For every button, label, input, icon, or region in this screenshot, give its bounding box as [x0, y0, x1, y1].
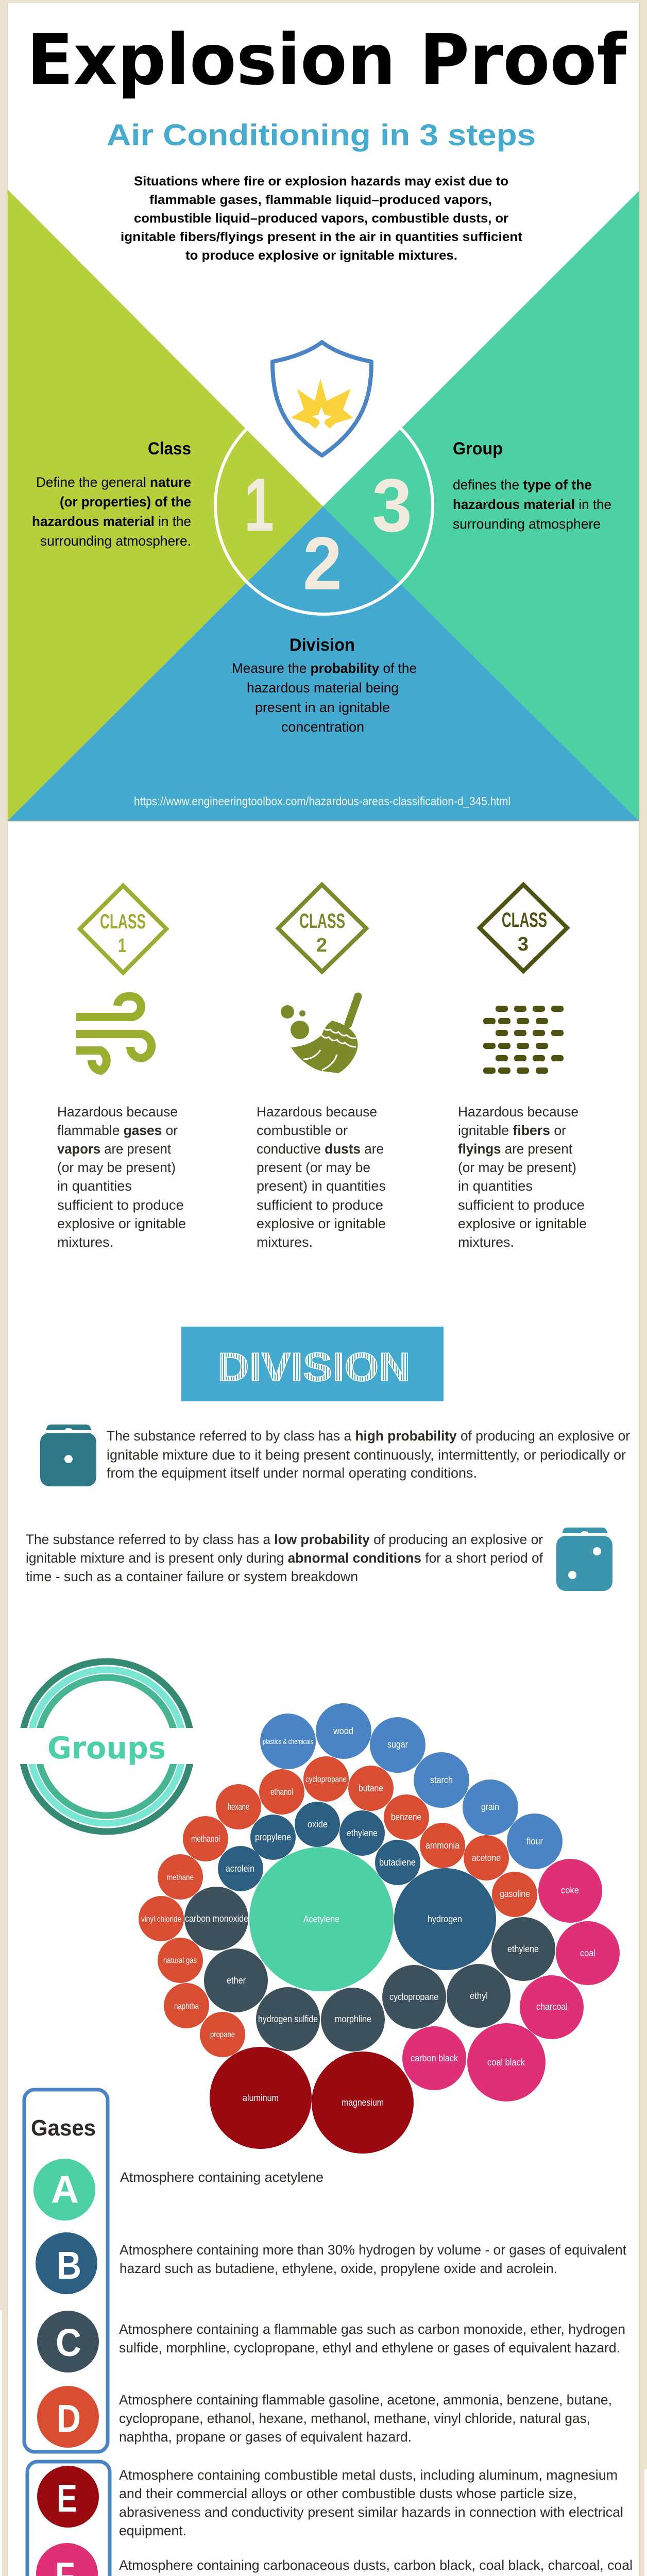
number 1: 1	[244, 463, 274, 547]
bubble: flour: flour	[526, 1836, 543, 1846]
bubble: aluminum: aluminum	[243, 2093, 279, 2103]
bubble: ether: ether	[227, 1975, 246, 1986]
text: class 2 description: sufficient to produce	[257, 1197, 383, 1213]
triangle: class panel	[8, 190, 323, 821]
bubble: oxide: oxide	[308, 1819, 328, 1829]
white ring	[215, 397, 433, 614]
text: class 2 description: mixtures.	[257, 1234, 313, 1250]
bubble: morphline: morphline	[335, 2014, 371, 2024]
text: class 3 description: mixtures.	[458, 1234, 514, 1250]
diamond badge: class 1: CLASS	[100, 910, 146, 933]
text: class 2 description: present (or may be	[257, 1160, 370, 1175]
bubble: naphtha	[164, 1983, 209, 2028]
text: division 1 description	[107, 1428, 630, 1481]
panel text: division: Measure the probability of the	[232, 660, 417, 676]
bubble: hydrogen: hydrogen	[428, 1914, 462, 1924]
text: division 1 description: The substance referred to by class has a high probability of producing an explosive or	[107, 1428, 630, 1444]
intro paragraph: flammable gases, flammable liquid–produced vapors,	[149, 193, 492, 207]
panel text: class: Class	[148, 439, 191, 459]
icon: die showing two	[556, 1528, 612, 1591]
text: class 1 description: Hazardous because	[57, 1104, 178, 1120]
bubble: sugar: sugar	[387, 1739, 408, 1750]
text: class 2 description	[257, 1104, 386, 1250]
text: class 3 description: in quantities	[458, 1178, 533, 1194]
class 1 column	[57, 886, 186, 1250]
panel text: group	[453, 439, 611, 532]
text: group D: naphtha, propane or gases of equivalent hazard.	[119, 2429, 412, 2445]
text: division 2 description	[26, 1532, 543, 1584]
subtitle: Air Conditioning in 3 steps	[107, 118, 536, 152]
bubble: butane	[348, 1766, 394, 1811]
bubble: benzene: benzene	[391, 1812, 421, 1822]
text: division 2 description: The substance referred to by class has a low probability of producing an explosive or	[26, 1532, 543, 1547]
diamond badge: class 1: 1	[118, 935, 126, 957]
text: group D: cyclopropane, ethanol, hexane, methanol, methane, vinyl chloride, natural gas,	[119, 2411, 590, 2426]
bubble: hexane: hexane	[228, 1802, 249, 1812]
bubble: ethanol	[259, 1769, 304, 1815]
bubble: ethylene group B	[339, 1810, 385, 1856]
bubble: ethanol: ethanol	[270, 1787, 293, 1797]
text: group B	[120, 2242, 626, 2276]
bubble: starch	[414, 1752, 469, 1808]
bubble: aluminum	[210, 2047, 312, 2149]
bubble: propane	[200, 2012, 245, 2057]
bubble: gasoline: gasoline	[500, 1889, 530, 1899]
bubble: carbon black	[402, 2026, 466, 2090]
bubble: benzene	[384, 1794, 429, 1840]
bubble: coal black	[467, 2023, 546, 2102]
diamond badge: class 3	[480, 885, 567, 971]
bubble: cyclopropane group C	[382, 1965, 446, 2029]
text: class 2 description: present) in quantities	[257, 1178, 386, 1194]
text: group B: hazard such as butadiene, ethylene, oxide, propylene oxide and acrolein.	[120, 2261, 557, 2276]
group badge F	[36, 2543, 98, 2576]
bubble: acetylene	[249, 1847, 394, 1991]
text: class 2 description: combustible or	[257, 1123, 348, 1138]
text: group E: equipment.	[119, 2523, 186, 2538]
group badge A	[33, 2159, 95, 2221]
diamond badge: class 3: CLASS	[502, 909, 547, 931]
bubble: propylene	[250, 1815, 296, 1860]
text: class 3 description: sufficient to produce	[458, 1197, 585, 1213]
text: class 1 description: mixtures.	[57, 1234, 113, 1250]
diamond badge: class 2: CLASS	[299, 910, 345, 933]
bubble: vinyl chloride: vinyl chloride	[141, 1915, 181, 1924]
group badge D	[37, 2386, 99, 2448]
bubble: charcoal	[520, 1975, 584, 2039]
text: class 1 description: vapors are present	[57, 1141, 171, 1157]
class 3 column	[458, 885, 587, 1250]
text: group E: Atmosphere containing combustible metal dusts, including aluminum, magnesium	[119, 2467, 618, 2483]
text: class 1 description: flammable gases or	[57, 1123, 178, 1138]
intro paragraph: combustible liquid–produced vapors, combustible dusts, or	[134, 211, 508, 226]
bubble: hexane	[216, 1784, 261, 1829]
bubble: oxide	[295, 1802, 340, 1847]
bubble: propylene: propylene	[255, 1832, 291, 1842]
text: class 2 description: explosive or ignitable	[257, 1216, 386, 1231]
gases box	[24, 2090, 108, 2452]
group badge C	[37, 2311, 99, 2372]
bubble: gasoline	[492, 1872, 537, 1917]
panel text: division: hazardous material being	[247, 680, 399, 696]
division banner: DIVISION	[217, 1344, 411, 1389]
bubble: natural gas: natural gas	[163, 1956, 197, 1965]
panel text: division: Division	[290, 635, 355, 655]
bubble: carbon monoxide: carbon monoxide	[185, 1913, 248, 1924]
group badge E: E	[57, 2477, 77, 2520]
panel text: class: hazardous material in the	[32, 514, 191, 529]
text: group E: and their commercial alloys or other combustible dusts whose particle size,	[119, 2486, 577, 2501]
bubble: butane: butane	[359, 1783, 383, 1793]
panel text: group: surrounding atmosphere	[453, 516, 601, 532]
bubble: charcoal: charcoal	[536, 2002, 568, 2012]
bubble: methanol	[183, 1816, 228, 1861]
icon: die showing one	[40, 1425, 96, 1486]
intro paragraph: Situations where fire or explosion hazards may exist due to	[134, 174, 508, 189]
bubble: flour	[507, 1814, 563, 1869]
bubble: methane	[158, 1854, 203, 1900]
number 2: 2	[303, 521, 342, 605]
bubble: wood	[316, 1703, 371, 1759]
bubble: sugar	[370, 1717, 425, 1773]
panel text: class	[32, 439, 191, 549]
text: division 1 description: from the equipment itself under normal operating conditions.	[107, 1465, 477, 1481]
panel text: class: surrounding atmosphere.	[40, 533, 191, 549]
bubble: butadiene: butadiene	[379, 1857, 416, 1868]
bubble: acetone: acetone	[472, 1853, 501, 1863]
group badge B	[36, 2232, 97, 2294]
diamond badge: class 3: 3	[518, 934, 529, 955]
panel text: class: Define the general nature	[36, 474, 191, 490]
panel text: division	[232, 635, 417, 735]
bubble: ethyl	[447, 1964, 510, 2028]
group badge E	[37, 2466, 99, 2528]
text: class 3 description	[458, 1104, 587, 1250]
text: group D	[119, 2392, 612, 2445]
triangle: division panel	[8, 506, 639, 821]
bubble: acrolein	[218, 1846, 263, 1891]
text: class 3 description: ignitable fibers or	[458, 1123, 566, 1138]
icon: explosion shield	[273, 342, 371, 455]
bubble: ether	[204, 1948, 268, 2012]
bubble: coke: coke	[561, 1885, 579, 1895]
icon: broom with dust	[281, 996, 358, 1073]
intro paragraph: to produce explosive or ignitable mixtures.	[185, 248, 457, 263]
number 3: 3	[372, 463, 412, 547]
bubble: methanol: methanol	[191, 1834, 220, 1844]
bubble: coal black: coal black	[487, 2057, 525, 2067]
text: group E	[119, 2467, 623, 2538]
bubble: magnesium: magnesium	[342, 2097, 384, 2108]
text: class 3 description: (or may be present)	[458, 1160, 576, 1175]
bubble: acetylene: Acetylene	[303, 1914, 339, 1924]
panel text: division: concentration	[281, 719, 364, 735]
text: division 2 description: time - such as a container failure or system breakdown	[26, 1569, 358, 1584]
bubble: natural gas	[158, 1938, 203, 1983]
division banner	[181, 1327, 444, 1401]
text: class 2 description: Hazardous because	[257, 1104, 377, 1120]
text: group D: Atmosphere containing flammable gasoline, acetone, ammonia, benzene, butane,	[119, 2392, 612, 2408]
diamond badge: class 1	[80, 886, 166, 973]
group badge B: B	[57, 2244, 81, 2287]
group badge A: A	[51, 2167, 79, 2211]
bubble: hydrogen	[394, 1868, 496, 1970]
bubble: plastics and chemicals: plastics & chemicals	[263, 1737, 313, 1745]
text: group E: abrasiveness and conductivity present similar hazards in connection with electrical	[119, 2504, 623, 2520]
groups badge: Groups	[47, 1730, 166, 1766]
bubble: ammonia	[420, 1823, 465, 1868]
group badge D: D	[57, 2397, 81, 2440]
bubble: ethylene group C	[491, 1917, 555, 1981]
title: Explosion Proof	[27, 20, 627, 101]
text: class 1 description: (or may be present)	[57, 1160, 176, 1175]
bubble: ammonia: ammonia	[425, 1840, 460, 1851]
text: class 2 description: conductive dusts are	[257, 1141, 384, 1157]
text: class 1 description: in quantities	[57, 1178, 132, 1194]
text: class 1 description: sufficient to produce	[57, 1197, 184, 1213]
bubble: propane: propane	[210, 2030, 235, 2039]
bubble: vinyl chloride	[139, 1896, 184, 1941]
text: class 1 description	[57, 1104, 186, 1250]
diamond badge: class 2: 2	[316, 935, 327, 956]
text: division 2 description: ignitable mixture and is present only during abnormal conditions for a short period of	[26, 1550, 543, 1566]
dusts box	[27, 2462, 110, 2576]
bubble: hydrogen sulfide	[256, 1987, 320, 2051]
bubble: naphtha: naphtha	[174, 2002, 199, 2011]
source url: https://www.engineeringtoolbox.com/hazardous-areas-classification-d_345.html	[134, 794, 510, 808]
bubble: ethylene group C: ethylene	[507, 1944, 539, 1954]
bubble: cyclopropane group D: cyclopropane	[305, 1774, 347, 1784]
bubble: cyclopropane group D	[303, 1756, 349, 1802]
bubble: magnesium	[312, 2052, 414, 2154]
triangle: group panel	[323, 191, 639, 821]
text: group B: Atmosphere containing more than 30% hydrogen by volume - or gases of equivalent	[120, 2242, 626, 2258]
bubble: morphline	[321, 1988, 385, 2052]
bubble: grain	[463, 1780, 518, 1835]
groups badge	[15, 1662, 198, 1832]
bubble: starch: starch	[430, 1775, 453, 1785]
text: group C: sulfide, morphline, cyclopropane, ethyl and ethylene or gases of equivalent hazard.	[119, 2340, 620, 2355]
bubble: methane: methane	[167, 1873, 194, 1882]
intro paragraph: ignitable fibers/flyings present in the air in quantities sufficient	[121, 230, 523, 244]
bubble: carbon monoxide	[184, 1887, 248, 1951]
text: class 3 description: flyings are present	[458, 1141, 572, 1157]
panel text: division: present in an ignitable	[255, 700, 390, 715]
bubble: coal	[556, 1921, 620, 1985]
bubble: ethyl: ethyl	[470, 1991, 488, 2001]
panel text: group: Group	[453, 439, 503, 459]
intro paragraph	[121, 174, 523, 263]
text: group C	[119, 2321, 625, 2355]
panel text: group: hazardous material in the	[453, 497, 611, 512]
group badge C: C	[56, 2321, 81, 2364]
bubble: hydrogen sulfide: hydrogen sulfide	[258, 2014, 318, 2024]
icon: fibers	[483, 1006, 564, 1074]
bubble: acetone	[464, 1835, 509, 1880]
bubble: coal: coal	[580, 1948, 595, 1958]
bubble chart	[139, 1703, 620, 2154]
bubble: grain: grain	[481, 1802, 499, 1812]
class 2 column	[257, 885, 386, 1250]
text: class 3 description: Hazardous because	[458, 1104, 578, 1120]
text: division 1 description: ignitable mixture due to it being present continuously, intermittently, or periodically or	[107, 1447, 626, 1463]
bubble: acrolein: acrolein	[226, 1863, 254, 1874]
bubble: cyclopropane group C: cyclopropane	[389, 1992, 438, 2002]
panel text: class: (or properties) of the	[60, 494, 191, 510]
text: class 3 description: explosive or ignitable	[458, 1216, 587, 1231]
bubble: plastics and chemicals	[260, 1714, 316, 1769]
bubble: butadiene	[375, 1840, 420, 1885]
text: group F: Atmosphere containing carbonaceous dusts, carbon black, coal black, charcoal, coal	[119, 2557, 633, 2573]
text: class 1 description: explosive or ignitable	[57, 1216, 186, 1231]
text: group C: Atmosphere containing a flammable gas such as carbon monoxide, ether, hydrogen	[119, 2321, 625, 2337]
text: group A: Atmosphere containing acetylene	[120, 2170, 324, 2185]
icon: wind	[76, 996, 151, 1071]
bubble: carbon black: carbon black	[411, 2053, 458, 2063]
diamond badge: class 2	[278, 885, 366, 972]
heading: gases: Gases	[31, 2115, 96, 2141]
bubble: coke	[538, 1859, 602, 1923]
panel text: group: defines the type of the	[453, 477, 592, 493]
bubble: wood: wood	[333, 1726, 353, 1736]
bubble: ethylene group B: ethylene	[347, 1828, 378, 1838]
